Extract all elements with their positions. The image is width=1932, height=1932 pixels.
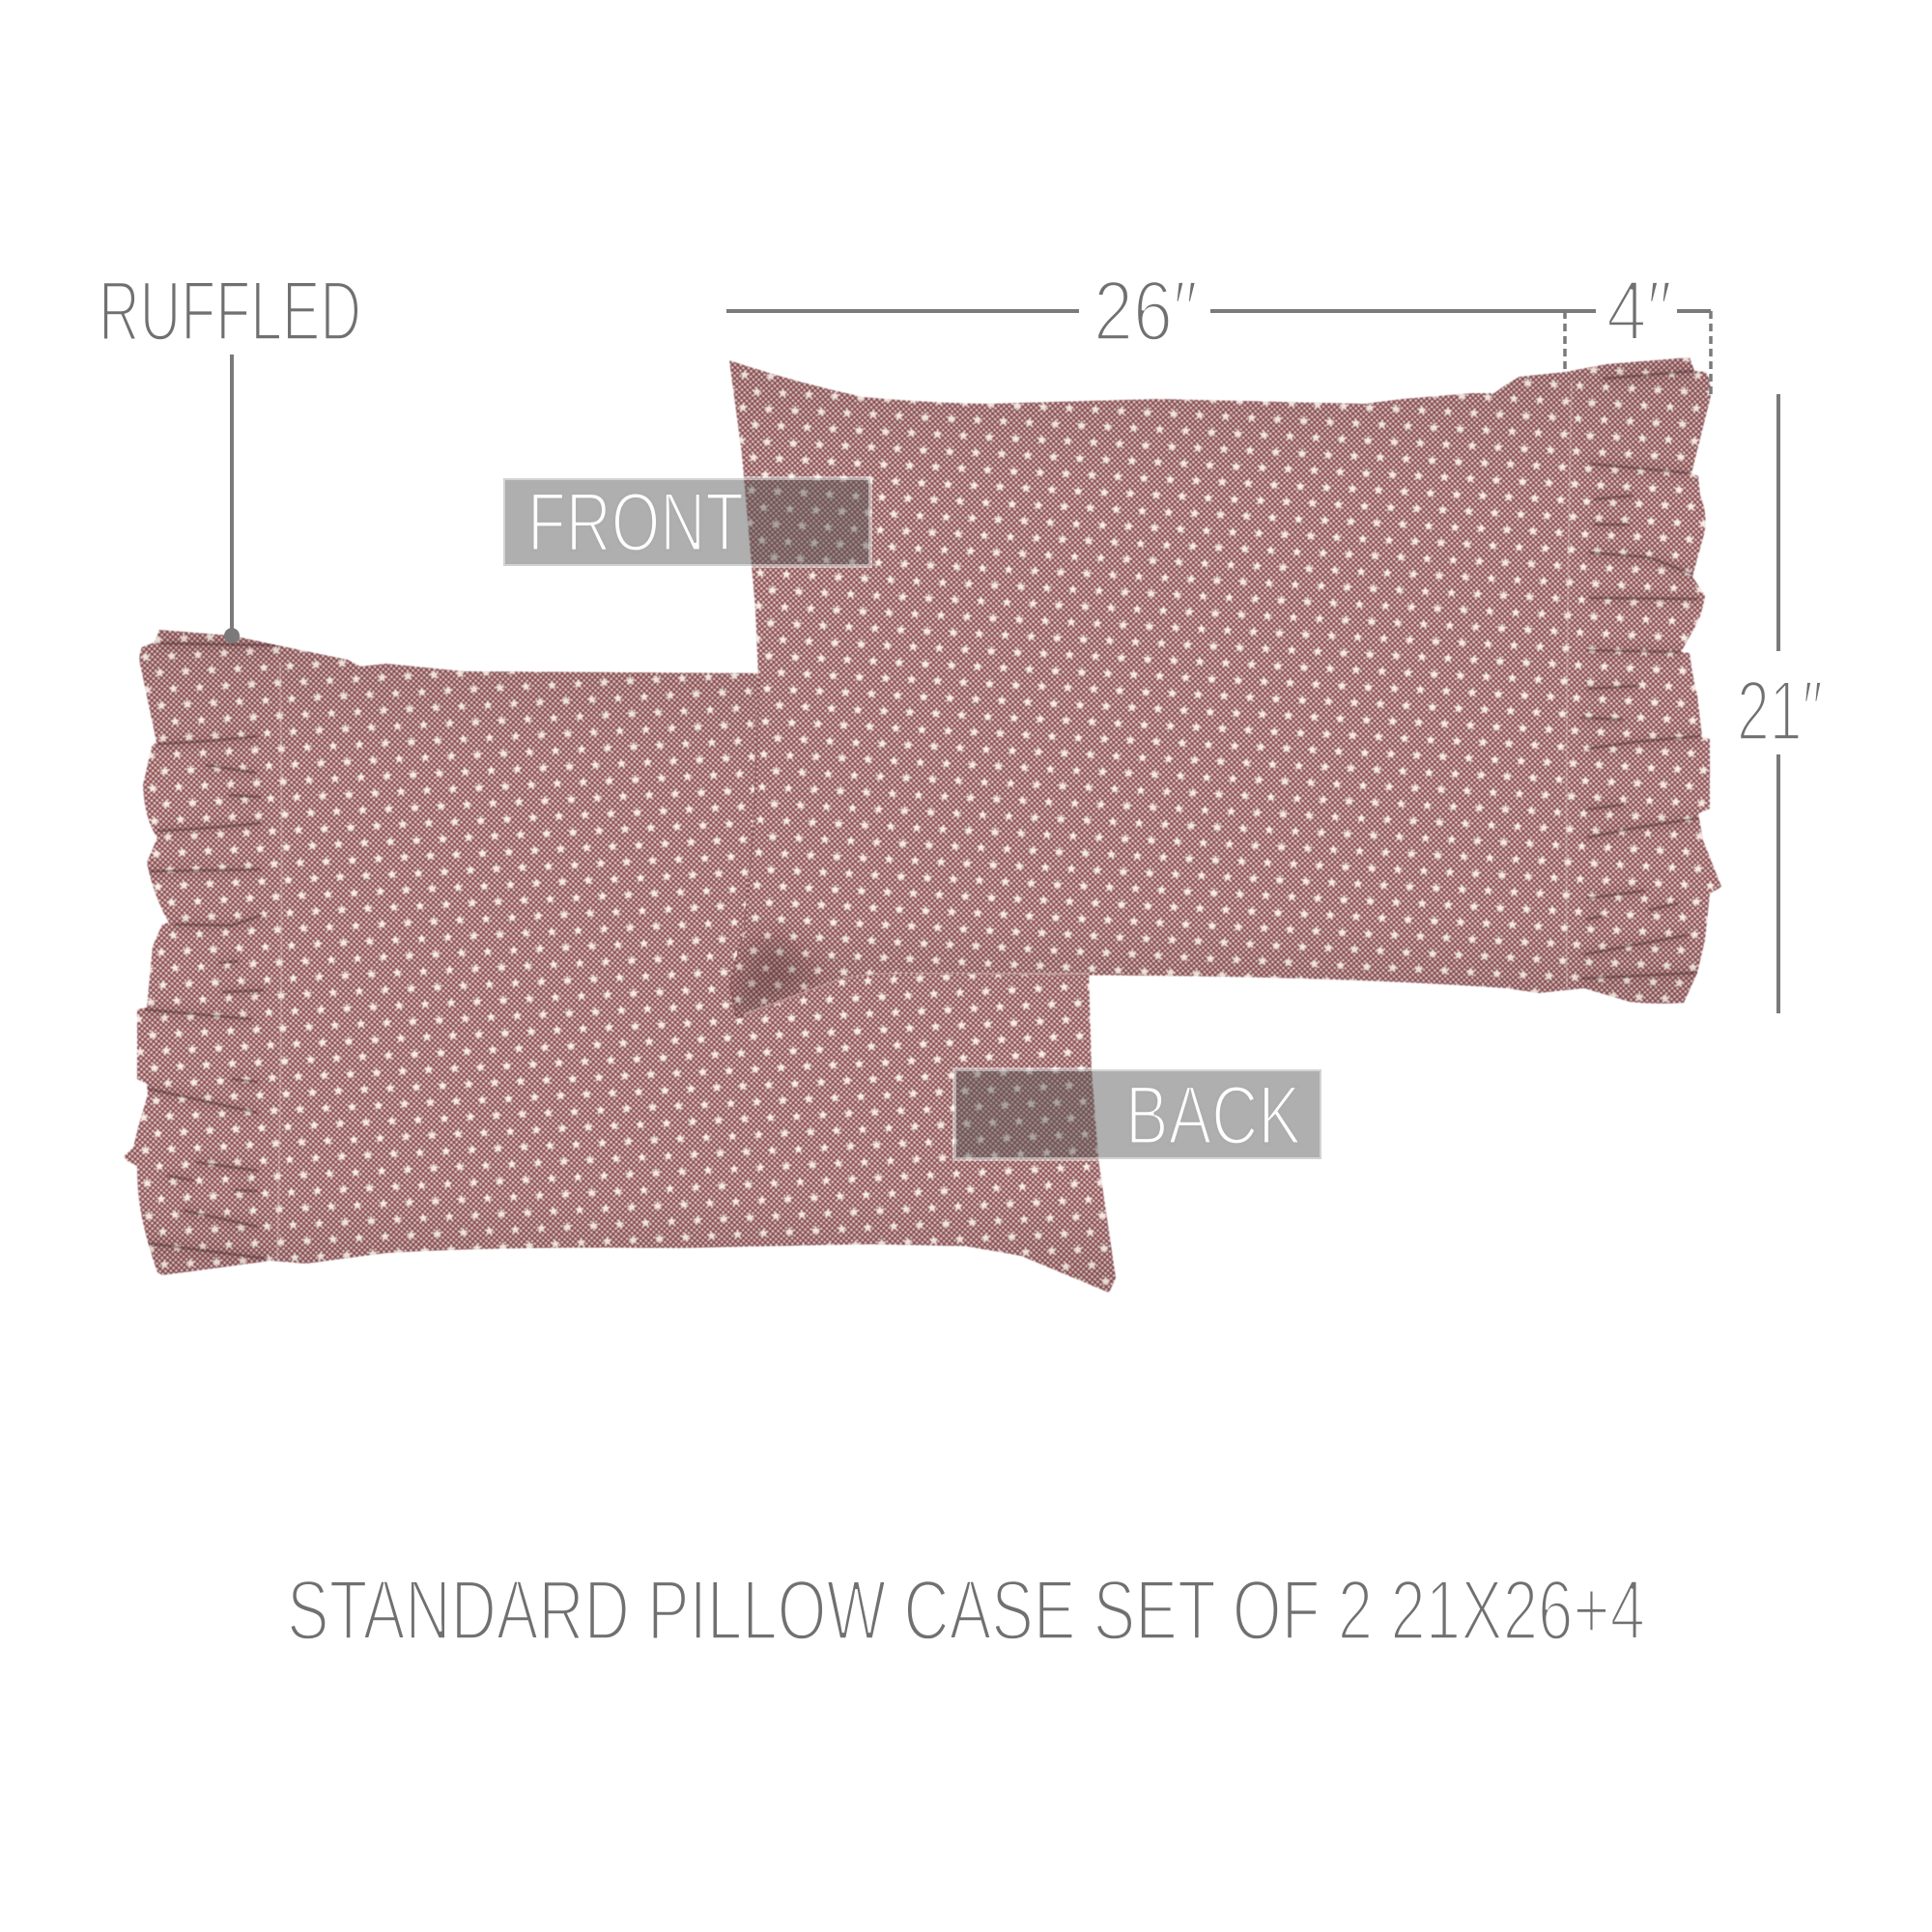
label: back: BACK xyxy=(1125,1069,1301,1162)
dimension: width 26 inches: 26″ xyxy=(1094,263,1198,358)
label: back xyxy=(954,1069,1321,1162)
ruffle creases: back pillow xyxy=(145,643,281,1261)
dimension: ruffle 4 inches: 4″ xyxy=(1606,263,1672,358)
ruffle creases and corner fold: front pillow xyxy=(729,371,1700,1022)
front pillow case with ruffle xyxy=(729,357,1721,1022)
back pillow case with ruffle xyxy=(124,630,1116,1293)
label: ruffled: RUFFLED xyxy=(99,263,361,358)
label: front: FRONT xyxy=(527,476,744,569)
dimension: height 21 inches: 21″ xyxy=(1737,663,1823,758)
leader line with dot xyxy=(224,355,240,643)
label: ruffled xyxy=(99,263,361,643)
